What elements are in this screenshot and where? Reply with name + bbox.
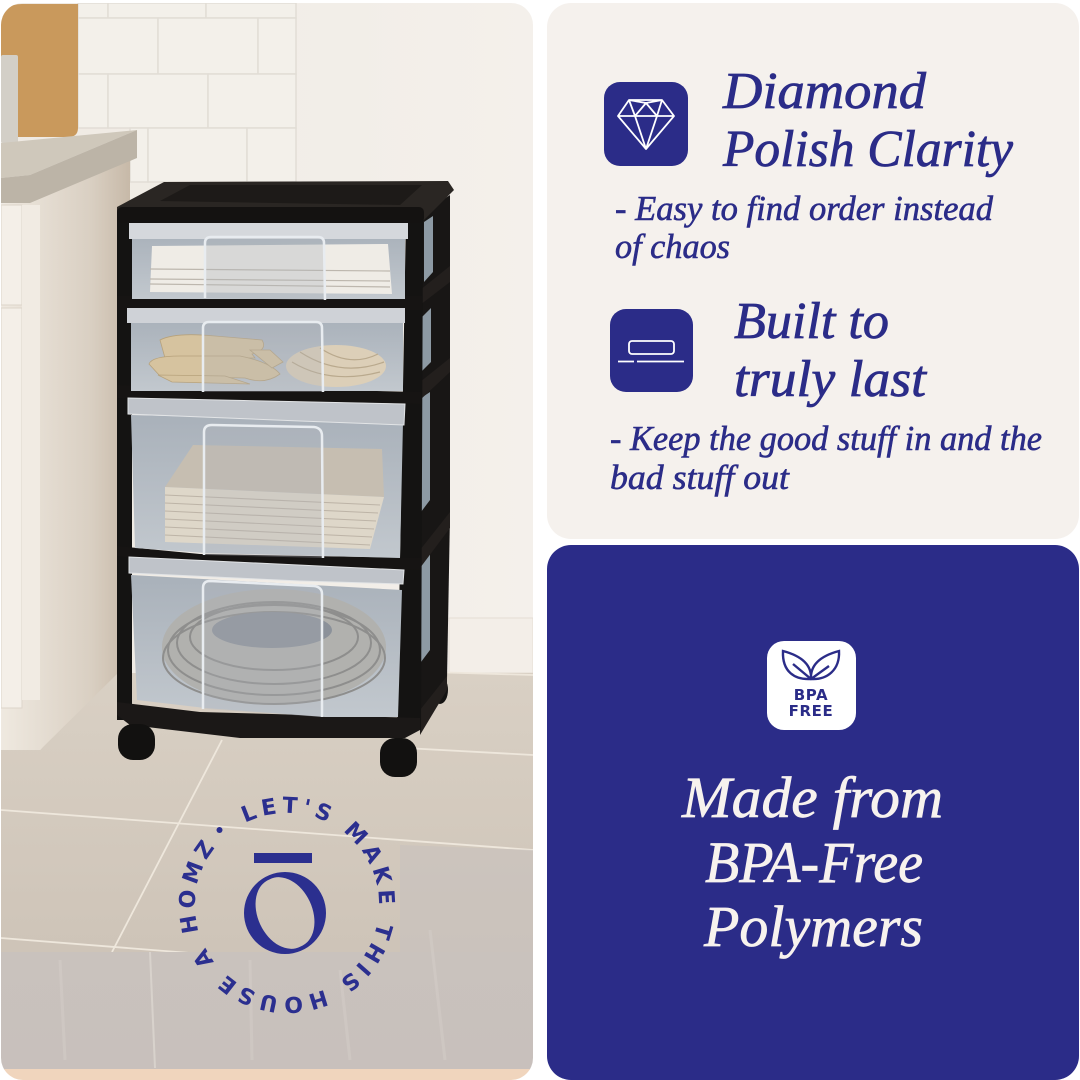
granite countertop [1, 130, 137, 203]
wooden board on counter [1, 4, 78, 137]
heading: made from BPA-free polymers: Polymers [703, 894, 923, 959]
icon: BPA free badge [767, 641, 856, 730]
heading: built to truly last: Built to [734, 293, 889, 350]
canister [1, 55, 18, 143]
panel: BPA free [547, 545, 1079, 1080]
shelf 1 [132, 299, 405, 308]
side rails [420, 266, 450, 735]
gloves [149, 335, 283, 384]
heading: diamond polish clarity: Polish Clarity [722, 121, 1014, 178]
panel: features [547, 3, 1079, 539]
baseboard [449, 618, 533, 673]
side openings [421, 216, 433, 662]
paper stack [165, 445, 384, 549]
folded towels [150, 244, 392, 294]
handle cut-out [203, 322, 323, 392]
rear wheel [438, 684, 448, 704]
logo letter o [244, 872, 326, 954]
leaves [783, 651, 839, 679]
shelf 3 [132, 548, 400, 570]
drawer cart [117, 181, 454, 777]
cart top lid [117, 181, 454, 223]
drawer 2 [127, 308, 405, 392]
front wheel right [380, 738, 417, 777]
shelf 2 [132, 391, 403, 404]
drawer 4 [129, 557, 404, 717]
badge label: BPA [794, 686, 828, 704]
drawer 3 [128, 398, 405, 558]
handle cut-out [204, 425, 323, 558]
text: durability description: bad stuff out [610, 458, 790, 497]
handle cut-out [203, 581, 322, 717]
icon: BPA free badge: FREE [789, 702, 833, 720]
right side frame [420, 195, 450, 730]
icon: seal [610, 309, 693, 392]
heading: diamond polish clarity: Diamond [722, 63, 927, 120]
front wheel left [118, 724, 155, 760]
circular slogan: LET'S MAKE THIS HOUSE A HOMZ [178, 796, 396, 1014]
icon: diamond [604, 82, 688, 166]
kitchen wall [1, 3, 533, 675]
text: diamond description: - Easy to find order instead [615, 189, 993, 228]
coiled hose [162, 589, 386, 705]
text: durability description: - Keep the good stuff in and the [610, 419, 1042, 458]
heading: built to truly last: truly last [734, 351, 928, 408]
tiled floor [1, 672, 533, 1080]
panel: product photo [1, 3, 533, 1080]
cabinet [1, 160, 130, 750]
base [117, 702, 420, 738]
brand badge [178, 796, 396, 1014]
drawer 1 [129, 223, 408, 300]
subway tile backsplash [78, 3, 296, 182]
ball of twine [286, 345, 386, 387]
frame front posts [117, 215, 423, 730]
heading: made from BPA-free polymers: Made from [681, 765, 943, 830]
logo macron [254, 853, 312, 863]
handle cut-out [205, 237, 325, 300]
heading: made from BPA-free polymers: BPA-Free [705, 830, 923, 895]
text: diamond description: of chaos [615, 227, 730, 266]
slogan dot [216, 827, 222, 833]
